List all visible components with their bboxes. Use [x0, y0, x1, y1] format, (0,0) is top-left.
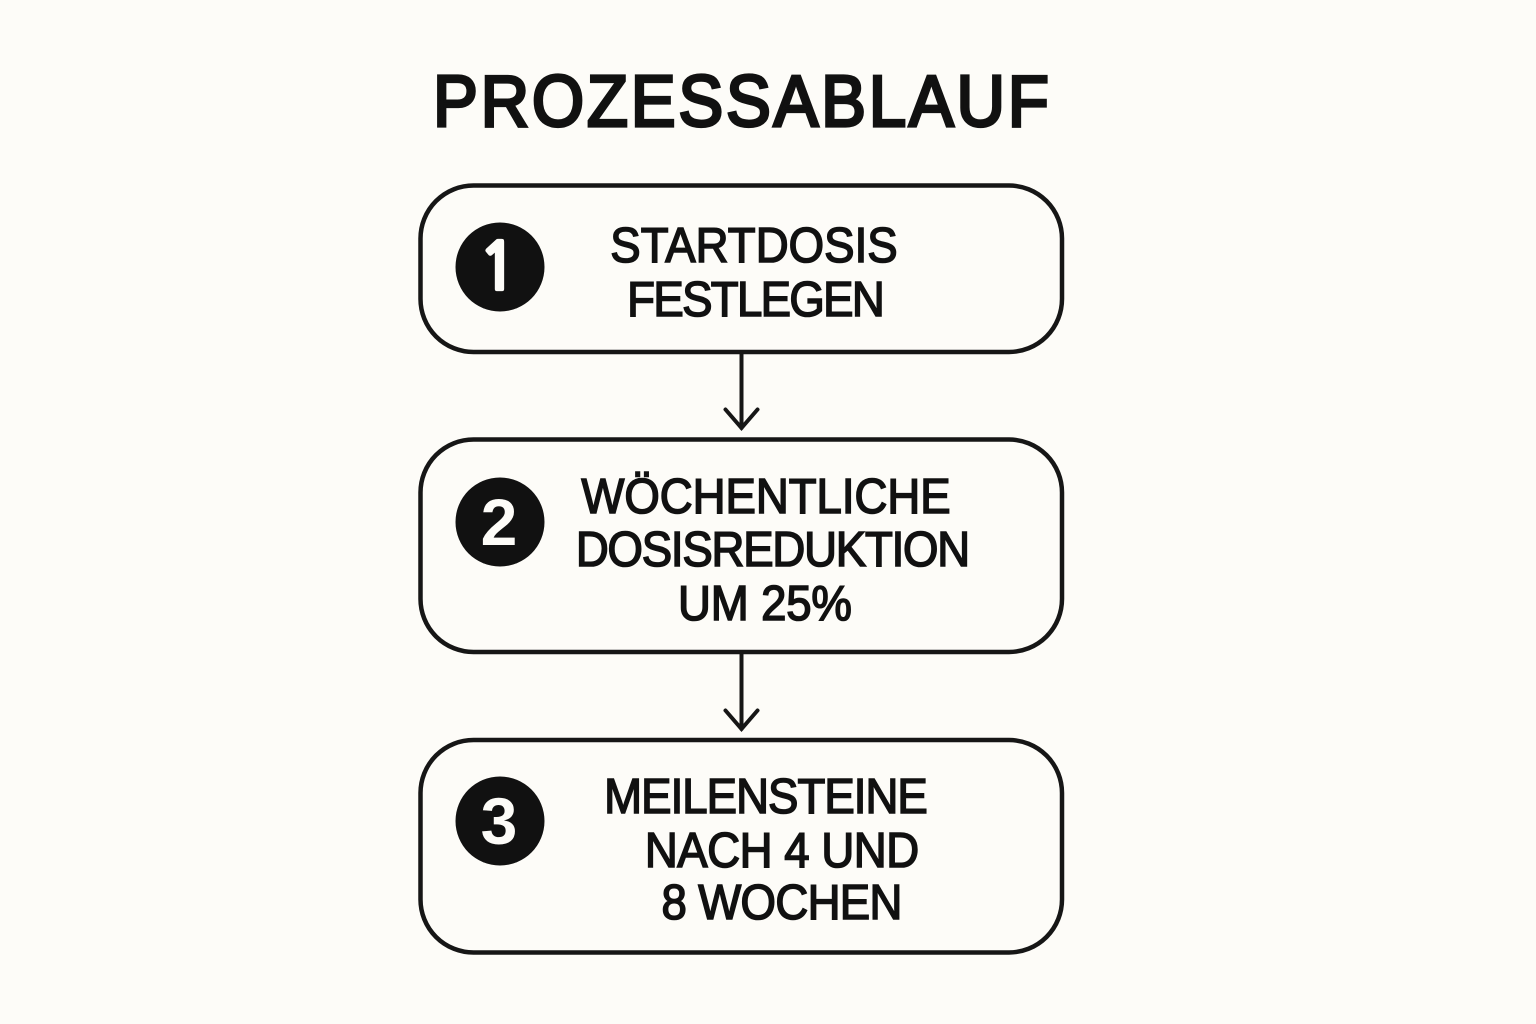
text: step 1 label: STARTDOSIS: [610, 219, 898, 273]
text: step 3 label: 8 WOCHEN: [662, 876, 902, 930]
text: step 2 label: DOSISREDUKTION: [576, 523, 970, 577]
panel: step 1: [420, 186, 1062, 352]
text: step 2 label: UM 25%: [678, 577, 852, 631]
arrow: step 2 to 3: [726, 652, 758, 729]
icon: number 1: 1: [478, 234, 518, 300]
icon: number 3: 3: [481, 784, 517, 858]
text: step 2 label: [576, 470, 970, 631]
text: step 1 label: [610, 219, 898, 327]
text: step 2 label: WÖCHENTLICHE: [581, 470, 951, 524]
text: step 1 label: FESTLEGEN: [627, 273, 885, 327]
title: PROZESSABLAUF: [433, 61, 1049, 142]
panel: step 3: [420, 740, 1062, 952]
panel: step 2: [420, 440, 1062, 652]
text: step 3 label: MEILENSTEINE: [604, 770, 928, 824]
text: step 3 label: NACH 4 UND: [645, 824, 919, 878]
text: step 3 label: [604, 770, 928, 930]
icon: number 2: [456, 478, 544, 566]
icon: number 3: [456, 776, 544, 866]
arrow: step 1 to 2: [726, 352, 758, 428]
icon: number 2: 2: [481, 485, 517, 559]
icon: number 1: [456, 222, 544, 312]
